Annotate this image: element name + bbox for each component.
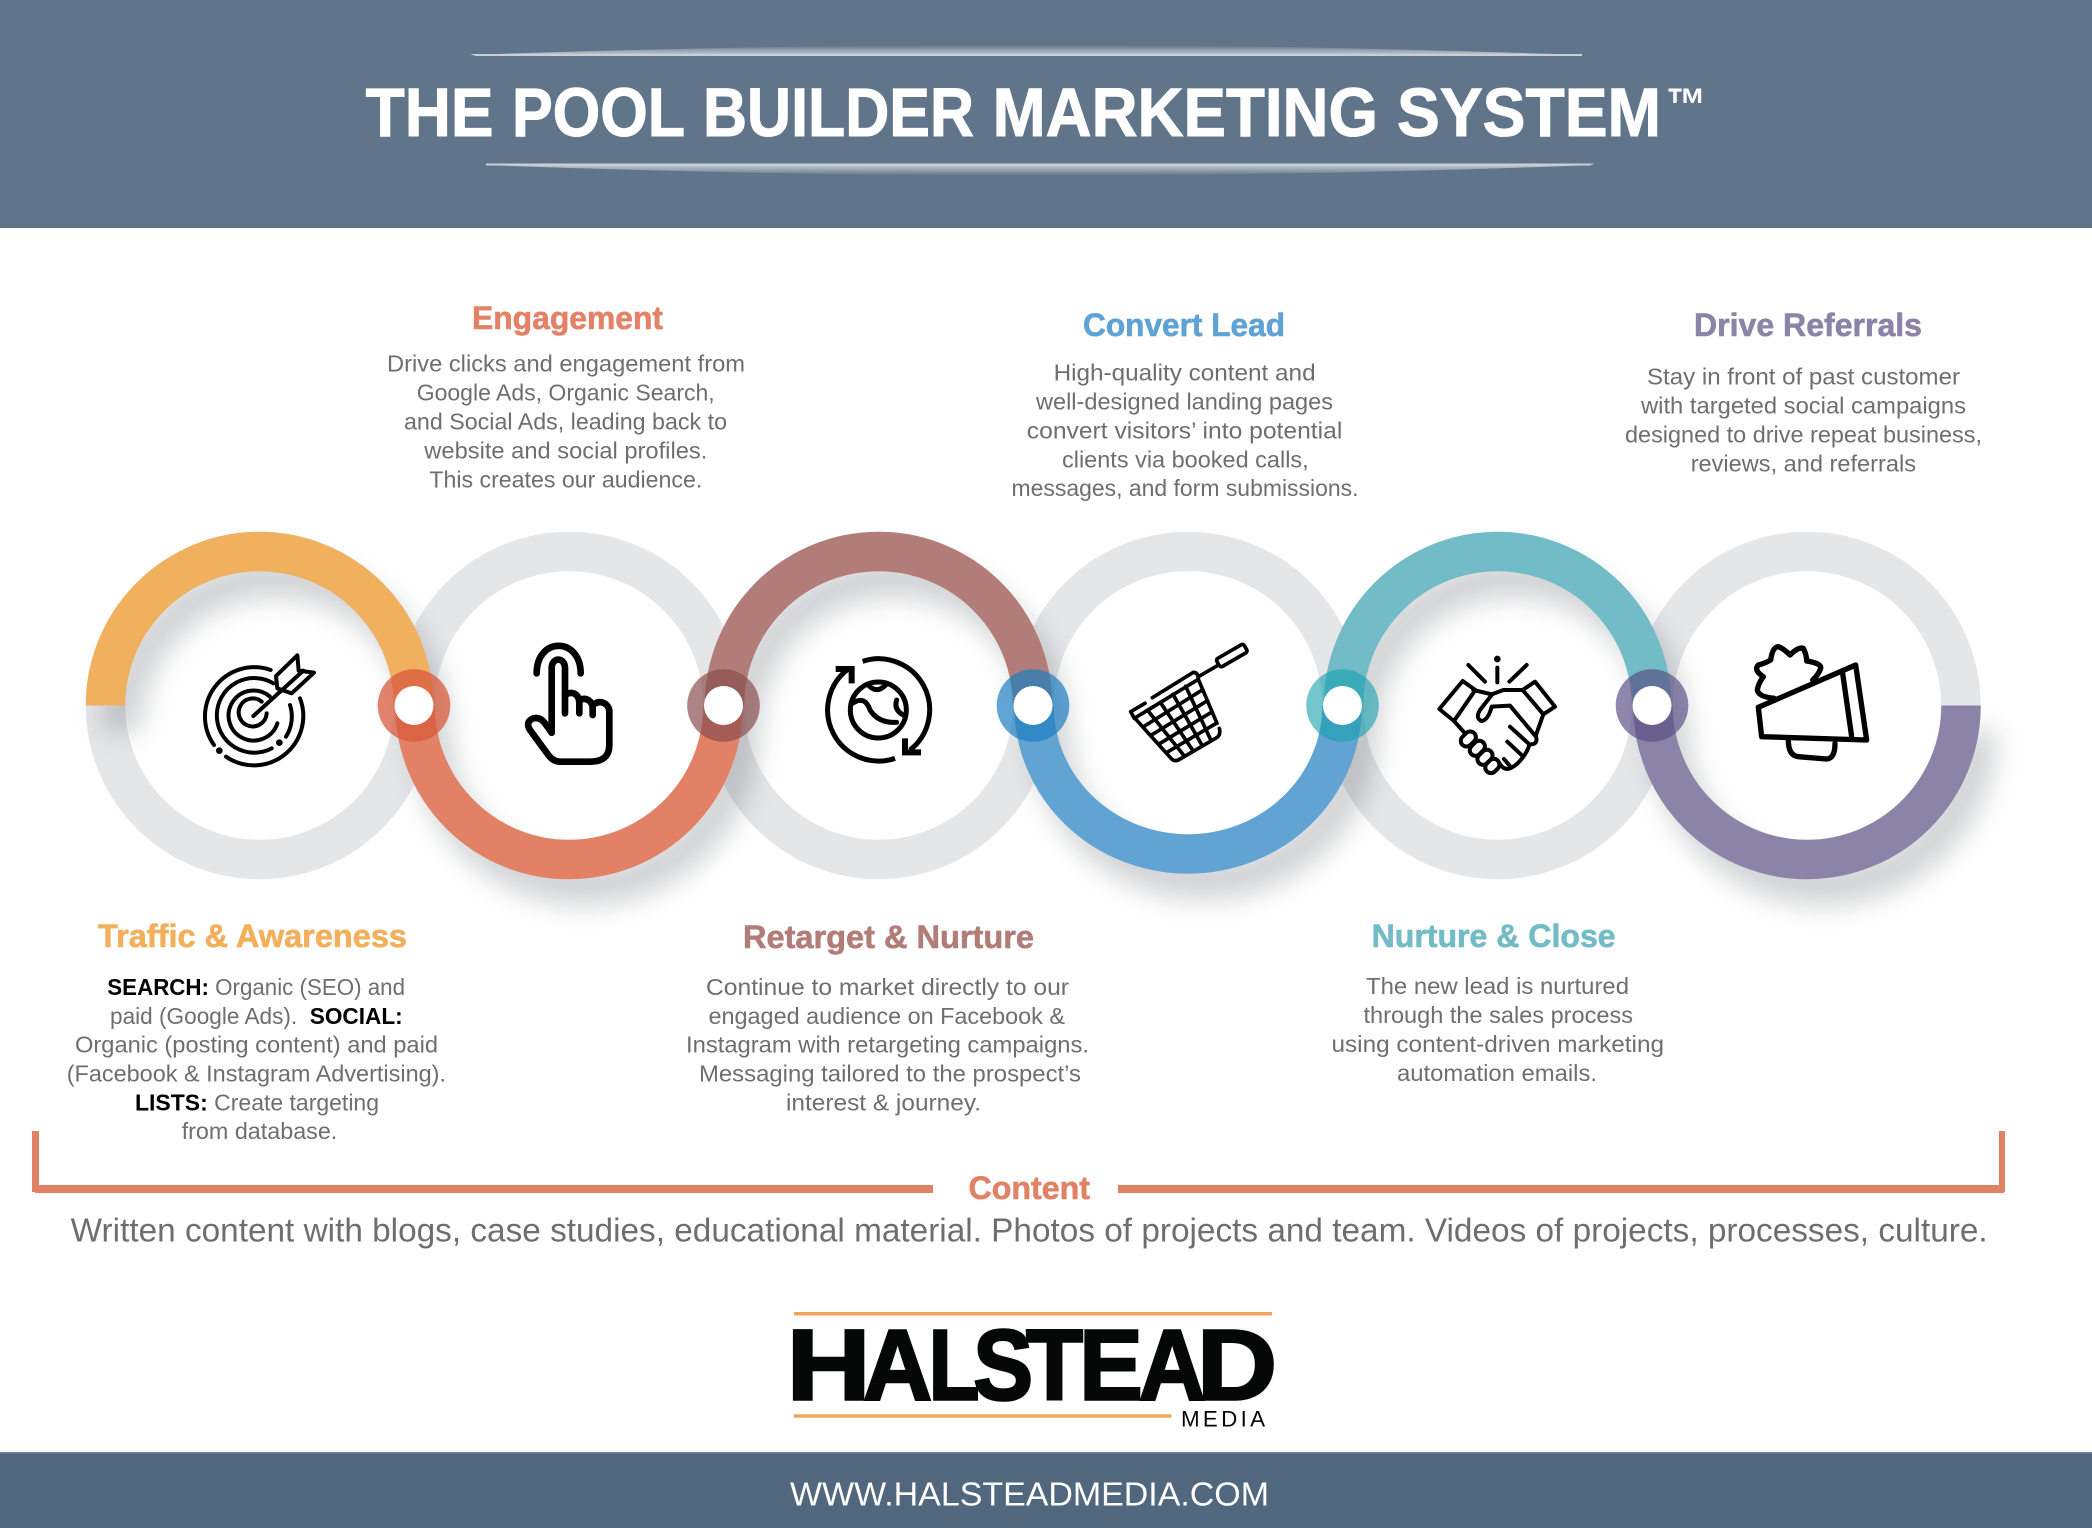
grey base rings xyxy=(106,552,1961,860)
logo wordmark: A xyxy=(863,1310,932,1422)
text block: nurture and close: automation emails. xyxy=(1397,1060,1597,1086)
text block: drive referrals xyxy=(1625,363,1982,476)
content description: Written content with blogs, case studies, educational material. Photos of projects and team. Videos of projects, processes, culture. xyxy=(71,1212,1988,1249)
heading: convert lead: Convert Lead xyxy=(1083,307,1285,343)
heading: retarget and nurture: Retarget & Nurture xyxy=(743,919,1034,955)
icon: target with arrow xyxy=(205,655,314,765)
title: THE xyxy=(366,74,494,151)
icon: globe with rotating arrows xyxy=(828,659,930,761)
text block: retarget and nurture: Instagram with retargeting campaigns. xyxy=(686,1032,1089,1058)
text block: engagement: website and social profiles. xyxy=(423,438,707,464)
panel: nurture and close text xyxy=(1332,918,1664,1086)
text block: drive referrals: reviews, and referrals xyxy=(1691,450,1916,476)
text block: drive referrals: designed to drive repeat business, xyxy=(1625,421,1982,447)
logo wordmark: H xyxy=(787,1310,871,1422)
text block: retarget and nurture: interest & journey. xyxy=(786,1090,981,1116)
text block: engagement: Google Ads, Organic Search, xyxy=(417,380,715,406)
text block: retarget and nurture: Messaging tailored to the prospect’s xyxy=(699,1061,1081,1087)
text block: convert lead: well-designed landing pages xyxy=(1035,389,1333,415)
text block: retarget and nurture: Continue to market directly to our xyxy=(706,974,1069,1000)
text block: traffic and awareness: Organic (posting content) and paid xyxy=(75,1032,438,1058)
heading: nurture and close: Nurture & Close xyxy=(1372,918,1616,954)
panel: convert lead text xyxy=(1012,307,1358,501)
title: MARKETING xyxy=(993,74,1378,151)
text block: engagement xyxy=(387,351,745,493)
text block: convert lead: messages, and form submissions. xyxy=(1012,475,1358,501)
text block: convert lead xyxy=(1012,360,1358,501)
logo wordmark: A xyxy=(1139,1310,1206,1422)
arc: convert, blue xyxy=(1034,706,1342,854)
heading: engagement: Engagement xyxy=(472,300,663,336)
icon: handshake xyxy=(1439,658,1555,775)
text block: convert lead: clients via booked calls, xyxy=(1062,446,1309,472)
arc shadows xyxy=(122,578,1977,886)
text block: drive referrals: Stay in front of past customer xyxy=(1647,363,1960,389)
panel: engagement text xyxy=(387,300,745,493)
arc: retarget, mauve xyxy=(724,552,1032,706)
text block: nurture and close xyxy=(1332,973,1664,1086)
text block: nurture and close: The new lead is nurtured xyxy=(1366,973,1629,999)
logo wordmark: T xyxy=(1026,1310,1083,1422)
text block: engagement: This creates our audience. xyxy=(429,467,702,493)
text block: traffic and awareness: paid (Google Ads). SOCIAL: xyxy=(110,1003,403,1029)
logo: Halstead Media xyxy=(787,1310,1277,1432)
title: SYSTEM xyxy=(1397,74,1661,151)
arc: referrals, purple xyxy=(1653,706,1961,860)
logo wordmark: E xyxy=(1079,1310,1143,1422)
connector: blue xyxy=(997,669,1069,742)
connector: purple xyxy=(1616,669,1688,742)
text block: convert lead: High-quality content and xyxy=(1054,360,1316,386)
text block: engagement: Drive clicks and engagement from xyxy=(387,351,745,377)
text block: nurture and close: using content-driven marketing xyxy=(1332,1031,1664,1057)
header banner xyxy=(0,0,2092,228)
heading: traffic and awareness: Traffic & Awareness xyxy=(98,918,407,954)
arc: nurture, teal xyxy=(1344,552,1652,706)
panel: drive referrals text xyxy=(1625,307,1982,476)
text block: traffic and awareness: (Facebook & Instagram Advertising). xyxy=(67,1061,446,1087)
text block: traffic and awareness: SEARCH: Organic (SEO) and xyxy=(107,974,405,1000)
title: BUILDER xyxy=(703,74,974,151)
logo wordmark: D xyxy=(1197,1310,1277,1422)
logo wordmark: S xyxy=(973,1310,1033,1422)
arc: traffic, orange xyxy=(106,552,414,706)
text block: traffic and awareness xyxy=(67,974,446,1144)
text block: convert lead: convert visitors’ into potential xyxy=(1027,418,1342,444)
panel: retarget and nurture text xyxy=(686,919,1089,1116)
icon: pool skimmer net xyxy=(1131,644,1248,761)
website url: WWW.HALSTEADMEDIA.COM xyxy=(790,1476,1269,1513)
heading: drive referrals: Drive Referrals xyxy=(1694,307,1922,343)
icon: pointing hand xyxy=(528,646,609,762)
text block: traffic and awareness: from database. xyxy=(182,1118,337,1144)
text block: drive referrals: with targeted social campaigns xyxy=(1640,392,1966,418)
panel: content bracket xyxy=(32,1131,2005,1249)
text block: retarget and nurture xyxy=(686,974,1089,1116)
arc: engagement, salmon xyxy=(415,706,723,860)
logo subtitle: MEDIA xyxy=(1181,1407,1265,1432)
connector: salmon xyxy=(378,669,450,742)
heading: content: Content xyxy=(968,1170,1090,1206)
title: POOL xyxy=(512,74,684,151)
footer banner xyxy=(0,1452,2092,1528)
text block: retarget and nurture: engaged audience on Facebook & xyxy=(708,1003,1065,1029)
panel: ring diagram xyxy=(106,552,1977,886)
icon: megaphone with burst xyxy=(1757,647,1867,759)
bracket lines xyxy=(32,1131,2005,1193)
panel: traffic and awareness text xyxy=(67,918,446,1144)
text block: engagement: and Social Ads, leading back to xyxy=(404,409,727,435)
connector: mauve xyxy=(687,669,760,742)
text block: traffic and awareness: LISTS: Create targeting xyxy=(135,1090,379,1116)
title: ™ xyxy=(1666,78,1706,130)
text block: nurture and close: through the sales process xyxy=(1364,1002,1633,1028)
logo wordmark: L xyxy=(929,1310,980,1422)
connector: teal xyxy=(1306,669,1379,742)
